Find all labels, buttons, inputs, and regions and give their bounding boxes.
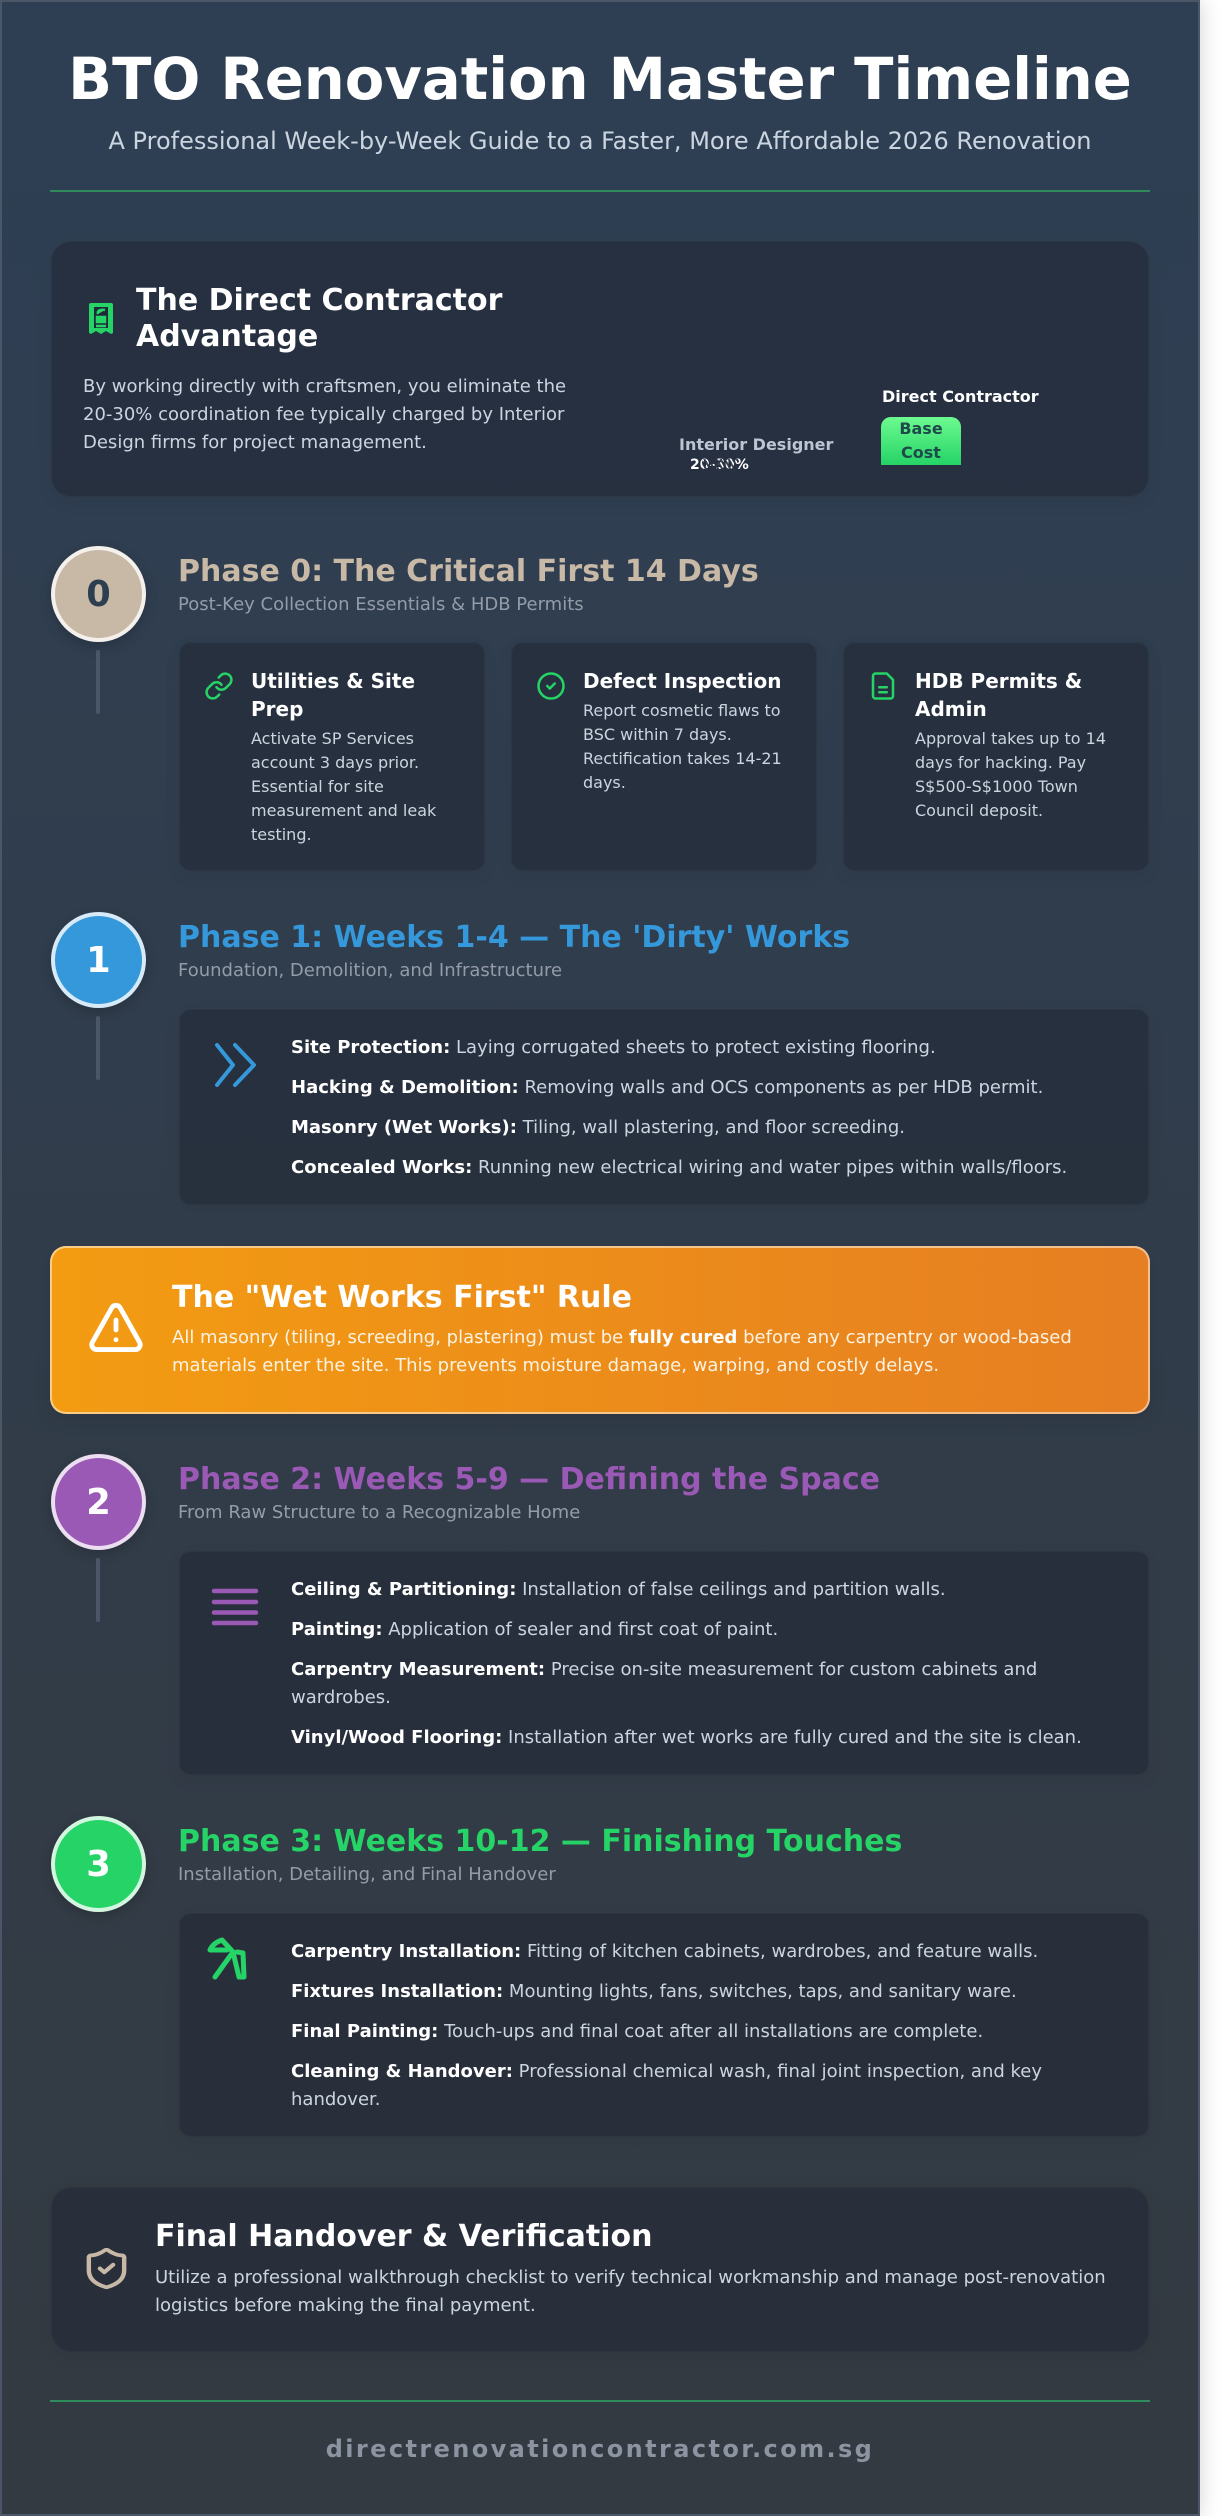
card title: Defect Inspection: [583, 669, 782, 693]
panel: phase 2 tasks: [179, 1551, 1149, 1775]
card: utilities and site prep: [179, 642, 485, 871]
task: wardrobes.: [291, 1687, 391, 1708]
card text: account 3 days prior.: [251, 752, 419, 772]
task: Fixtures Installation: Mounting lights, fans, switches, taps, and sanitary ware.: [291, 1981, 1017, 2002]
task: Vinyl/Wood Flooring: Installation after wet works are fully cured and the site is clean.: [291, 1727, 1082, 1748]
task list: Site Protection: Laying corrugated sheets to protect existing flooring.: [291, 1037, 936, 1058]
card title: Utilities & Site: [251, 669, 415, 693]
card: defect inspection: [511, 642, 817, 871]
phase 0 badge: 0: [86, 574, 111, 614]
heading: the direct contractor advantage: Advantage: [136, 319, 318, 354]
phase 2 badge: 2: [86, 1482, 111, 1522]
phase 1 heading: Phase 1: Weeks 1-4 — The 'Dirty' Works: [178, 920, 850, 955]
task list: Carpentry Installation: Fitting of kitchen cabinets, wardrobes, and feature walls.: [291, 1941, 1038, 1962]
phase 3 badge: [51, 1816, 146, 1912]
panel: phase 1 tasks: [179, 1009, 1149, 1205]
callout: wet works first rule: [50, 1246, 1150, 1414]
task: Hacking & Demolition: Removing walls and OCS components as per HDB permit.: [291, 1077, 1043, 1098]
card text: days for hacking. Pay: [915, 752, 1086, 772]
text: logistics before making the final payment.: [155, 2295, 536, 2316]
card text: Report cosmetic flaws to: [583, 700, 781, 720]
value: interior designer fee: 20-30%: [690, 457, 749, 473]
phase 3 heading: Phase 3: Weeks 10-12 — Finishing Touches: [178, 1824, 902, 1859]
phase 0 subheading: Post-Key Collection Essentials & HDB Permits: [178, 594, 584, 615]
task: Masonry (Wet Works): Tiling, wall plastering, and floor screeding.: [291, 1117, 905, 1138]
callout text: [172, 1327, 1072, 1376]
phase 1 subheading: Foundation, Demolition, and Infrastructure: [178, 960, 562, 981]
phase 3 badge: 3: [86, 1844, 111, 1884]
phase 0 badge: [51, 546, 146, 642]
icon: warning triangle: [89, 1302, 143, 1352]
card: hdb permits and admin: [843, 642, 1149, 871]
title: BTO Renovation Master Timeline: [68, 46, 1132, 113]
card text: [251, 728, 436, 844]
phase 3 subheading: Installation, Detailing, and Final Handover: [178, 1864, 556, 1885]
task: [291, 1659, 1037, 1708]
card text: [915, 728, 1106, 820]
panel: final handover: [51, 2187, 1149, 2352]
card text: Rectification takes 14-21: [583, 748, 782, 768]
text: advantage description: By working directly with craftsmen, you eliminate the: [83, 376, 566, 396]
task: Concealed Works: Running new electrical wiring and water pipes within walls/floors.: [291, 1157, 1067, 1178]
card text: Council deposit.: [915, 800, 1043, 820]
task: Painting: Application of sealer and first coat of paint.: [291, 1619, 778, 1640]
icon: check circle: [537, 672, 565, 700]
icon: bars: [212, 1588, 258, 1626]
heading: Final Handover & Verification: [155, 2219, 653, 2254]
icon: hammer: [208, 1938, 246, 1980]
card title: HDB Permits &: [915, 669, 1082, 693]
card text: [583, 700, 782, 792]
task: [291, 2061, 1042, 2110]
bar: base cost: Cost: [901, 443, 941, 462]
heading: the direct contractor advantage: [136, 283, 502, 354]
icon: receipt: [89, 303, 113, 334]
bar: base cost: [881, 417, 961, 465]
icon: shield check: [86, 2248, 126, 2290]
card text: Activate SP Services: [251, 728, 414, 748]
icon: file: [872, 672, 894, 700]
callout text: materials enter the site. This prevents moisture damage, warping, and costly delays.: [172, 1355, 939, 1376]
subtitle: A Professional Week-by-Week Guide to a Faster, More Affordable 2026 Renovation: [108, 127, 1091, 155]
card title: Prep: [251, 697, 303, 721]
label: interior designer: Interior Designer: [679, 434, 833, 454]
phase 1 badge: 1: [86, 940, 111, 980]
card text: measurement and leak: [251, 800, 436, 820]
icon: chevrons: [214, 1042, 256, 1088]
bar: base cost: Base: [899, 419, 943, 438]
card text: testing.: [251, 824, 312, 844]
text: Utilize a professional walkthrough checklist to verify technical workmanship and manage post-renovation: [155, 2267, 1106, 2288]
panel: direct contractor advantage: [51, 241, 1149, 497]
phase 2 subheading: From Raw Structure to a Recognizable Home: [178, 1502, 580, 1523]
task: handover.: [291, 2089, 380, 2110]
phase 1 badge: [51, 912, 146, 1008]
card text: S$500-S$1000 Town: [915, 776, 1078, 796]
callout heading: The "Wet Works First" Rule: [172, 1280, 632, 1315]
card text: days.: [583, 772, 626, 792]
text: advantage description: Design firms for project management.: [83, 432, 427, 452]
text: [155, 2267, 1106, 2316]
phase 0 heading: Phase 0: The Critical First 14 Days: [178, 554, 759, 589]
task list: Ceiling & Partitioning: Installation of false ceilings and partition walls.: [291, 1579, 946, 1600]
task: Cleaning & Handover: Professional chemical wash, final joint inspection, and key: [291, 2061, 1042, 2082]
card text: BSC within 7 days.: [583, 724, 732, 744]
label: direct contractor: Direct Contractor: [882, 386, 1039, 406]
panel: phase 3 tasks: [179, 1913, 1149, 2137]
phase 2 heading: Phase 2: Weeks 5-9 — Defining the Space: [178, 1462, 880, 1497]
callout text: All masonry (tiling, screeding, plastering) must be fully cured before any carpentry or wood-based: [172, 1327, 1072, 1348]
card title: [251, 669, 415, 721]
footer url: directrenovationcontractor.com.sg: [326, 2435, 874, 2463]
task: Carpentry Measurement: Precise on-site measurement for custom cabinets and: [291, 1659, 1037, 1680]
card title: [915, 669, 1082, 721]
text: advantage description: [83, 376, 566, 452]
card text: Essential for site: [251, 776, 384, 796]
card title: Admin: [915, 697, 987, 721]
phase 2 badge: [51, 1454, 146, 1550]
heading: the direct contractor advantage: The Direct Contractor: [136, 283, 502, 318]
task: Final Painting: Touch-ups and final coat after all installations are complete.: [291, 2021, 983, 2042]
card text: Approval takes up to 14: [915, 728, 1106, 748]
text: advantage description: 20-30% coordination fee typically charged by Interior: [83, 404, 564, 424]
icon: link: [205, 672, 233, 700]
